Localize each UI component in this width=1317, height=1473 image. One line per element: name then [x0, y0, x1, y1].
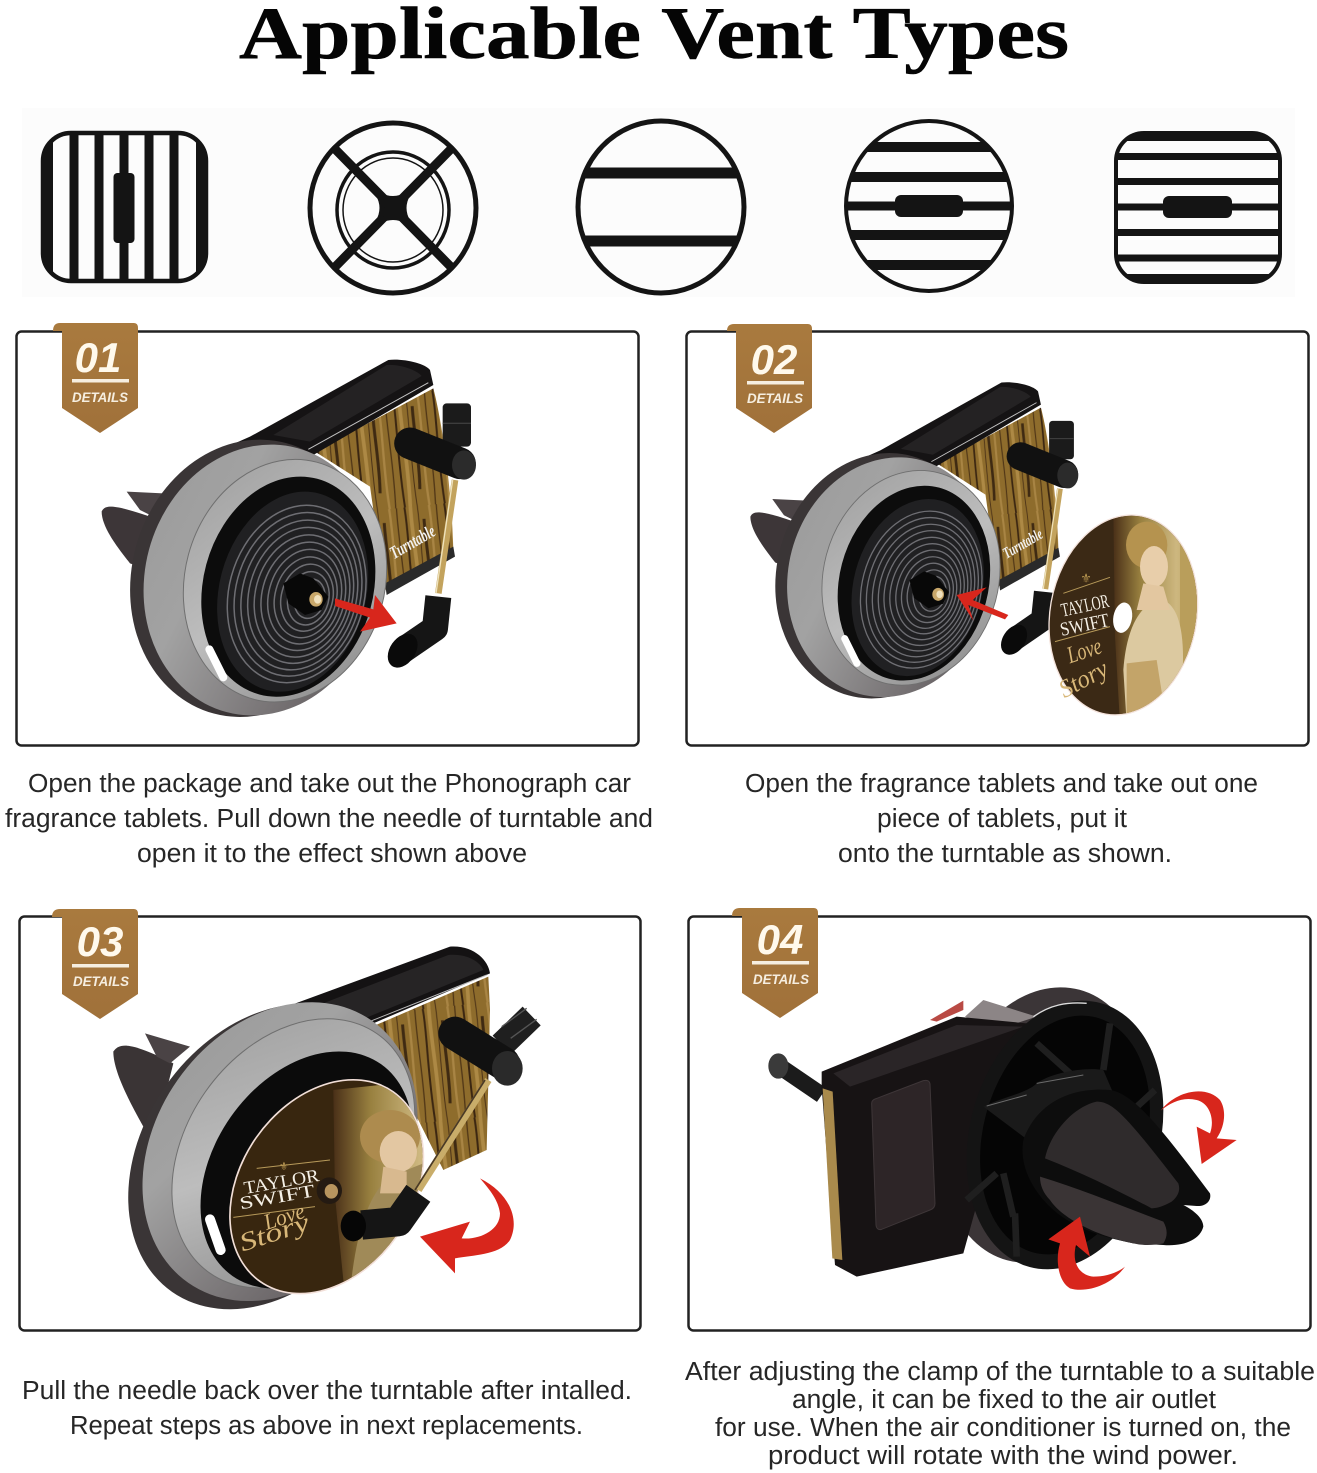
- illustration: turntable and fragrance tablet: [748, 382, 1214, 728]
- arrow: red arrow towards needle: [335, 595, 397, 632]
- badge 01: [53, 323, 138, 433]
- fragrance tablet on turntable: SWIFT: [238, 1180, 316, 1213]
- arrow: red curved arrow right: [1161, 1091, 1237, 1164]
- fragrance tablet on turntable: Story: [236, 1207, 313, 1257]
- illustration: turntable with needle pulled down: [99, 360, 476, 744]
- panel: step 3: [20, 909, 640, 1363]
- fragrance tablet on turntable: TAYLOR: [242, 1165, 321, 1198]
- icon: vertical rectangular vent: [41, 131, 208, 285]
- caption: step 1: fragrance tablets. Pull down the needle of turntable and: [5, 805, 653, 833]
- illustration: turntable with tablet installed: [113, 946, 541, 1310]
- panel: step 1: [16, 323, 638, 746]
- badge 03: DETAILS: [73, 973, 130, 989]
- arrow: red curved arrow bottom: [1048, 1217, 1125, 1290]
- caption: step 3: Pull the needle back over the turntable after intalled.: [22, 1377, 632, 1405]
- badge 01: 01: [75, 334, 121, 381]
- spindle: [317, 1177, 342, 1204]
- badge 02: 02: [751, 336, 797, 383]
- fragrance tablet disc: [1033, 502, 1214, 728]
- badge 03: [52, 909, 138, 1019]
- caption: step 3: [22, 1377, 632, 1440]
- caption: step 1: Open the package and take out the Phonograph car: [28, 770, 632, 798]
- fragrance tablet disc: Love: [1063, 633, 1105, 669]
- icon: rectangular horizontal vent: [1110, 130, 1290, 284]
- badge 01: DETAILS: [72, 389, 129, 405]
- arrow: red curved arrow: [420, 1178, 514, 1273]
- badge 04: [732, 908, 818, 1018]
- fragrance tablet disc: TAYLOR: [1059, 591, 1111, 622]
- fragrance tablet disc: Story: [1054, 654, 1113, 704]
- arrow: red arrow towards spindle: [957, 587, 1008, 621]
- caption: step 4: After adjusting the clamp of the turntable to a suitable: [685, 1358, 1315, 1386]
- badge 04: DETAILS: [753, 971, 810, 987]
- panel: step 4: [688, 908, 1310, 1330]
- fragrance tablet disc: ⚜: [1080, 571, 1092, 586]
- panel: vent type icons: [22, 108, 1295, 297]
- badge 02: DETAILS: [747, 390, 804, 406]
- illustration: turntable with needle pulled down: Turntable: [386, 521, 439, 563]
- caption: step 4: product will rotate with the wind power.: [768, 1442, 1238, 1470]
- tonearm: [341, 1008, 537, 1241]
- caption: step 1: [5, 770, 653, 868]
- illustration: turntable and fragrance tablet: Turntable: [1000, 526, 1046, 562]
- caption: step 1: open it to the effect shown above: [137, 840, 527, 868]
- caption: step 4: angle, it can be fixed to the air outlet: [792, 1386, 1216, 1414]
- caption: step 4: [685, 1358, 1315, 1470]
- fragrance tablet on turntable: Love: [260, 1198, 308, 1235]
- caption: step 2: onto the turntable as shown.: [838, 840, 1172, 868]
- caption: step 2: Open the fragrance tablets and take out one: [745, 770, 1258, 798]
- caption: step 3: Repeat steps as above in next replacements.: [70, 1412, 583, 1440]
- badge 02: [727, 324, 812, 433]
- caption: step 2: piece of tablets, put it: [877, 805, 1127, 833]
- icon: round cross vent: [310, 123, 476, 293]
- icon: round horizontal vent: [840, 121, 1020, 291]
- panel: step 2: [686, 324, 1308, 746]
- caption: step 4: for use. When the air conditioner is turned on, the: [715, 1414, 1291, 1442]
- illustration: rear of turntable with vent clip: [768, 964, 1237, 1292]
- icon: round two-bar vent: [575, 121, 747, 293]
- fragrance tablet disc: SWIFT: [1058, 610, 1111, 641]
- fragrance tablet on turntable: [229, 1079, 424, 1294]
- badge 03: 03: [77, 918, 123, 965]
- caption: step 2: [745, 770, 1258, 868]
- badge 04: 04: [757, 916, 803, 963]
- fragrance tablet on turntable: ⚜: [279, 1159, 289, 1173]
